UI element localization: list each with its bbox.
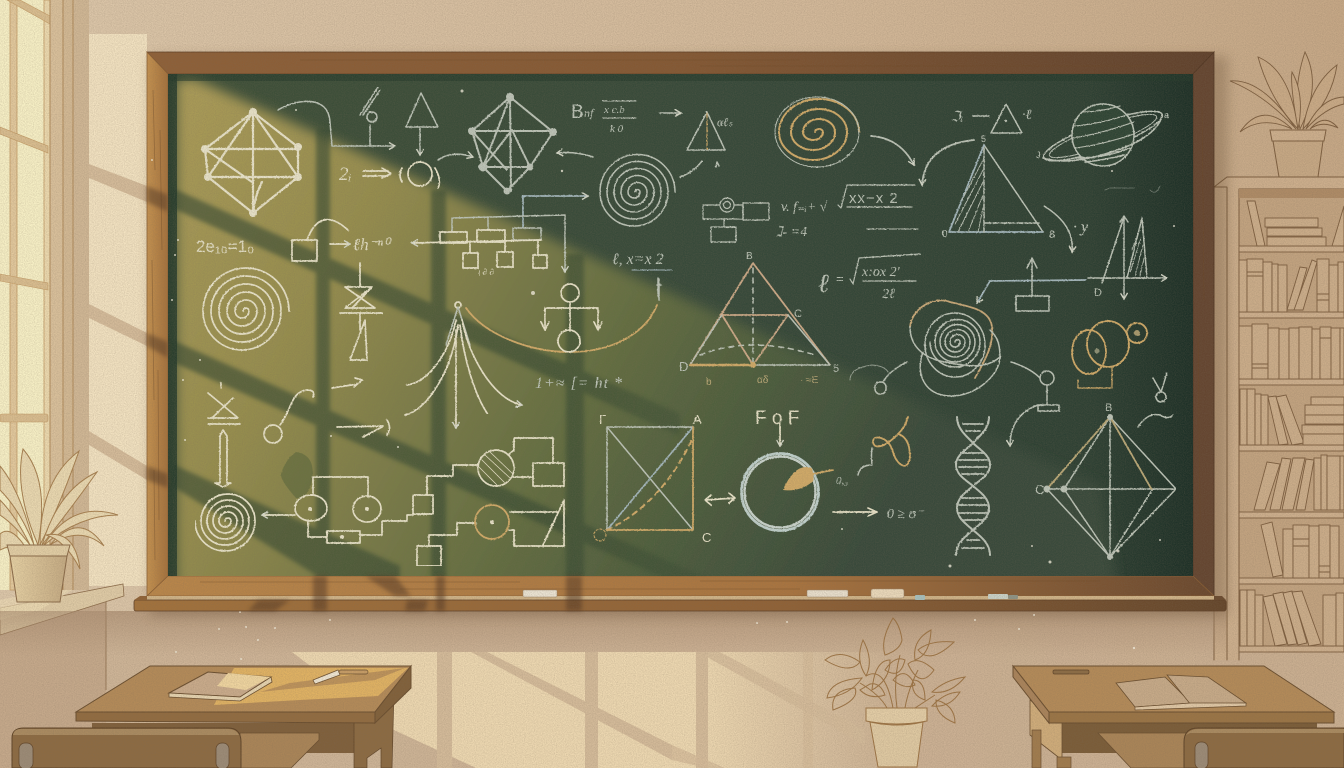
fraction formula: 2ℓ [882, 287, 895, 302]
polyhedron middle [438, 93, 593, 194]
fan of curves [405, 302, 522, 428]
small triangle with label [951, 104, 1032, 133]
desk top [76, 666, 411, 723]
hourglass figure [332, 263, 382, 388]
left chair [12, 728, 319, 768]
fraction formula [818, 254, 920, 302]
chalk dust specks [151, 90, 1175, 660]
square-root formula with box: ℷ- =4 [776, 225, 807, 240]
arrow and formula: 0,₃ [836, 475, 848, 487]
large diamond: C [1035, 482, 1044, 497]
book on desk [169, 672, 272, 701]
faint notes with y label: · y [1073, 219, 1089, 236]
chalkboard frame [147, 52, 1214, 596]
big centre triangle: C [794, 308, 802, 320]
spiral bottom left [195, 494, 255, 551]
fraction formula: ℓ [818, 269, 829, 298]
large ring with leaf [705, 408, 833, 530]
mini axis graph [1088, 216, 1167, 299]
desk body and legs [1030, 700, 1317, 768]
centre potted plant [825, 618, 965, 767]
large diamond: B [1105, 402, 1112, 414]
square-root formula with box: v. f₌ᵢ+ √ [781, 200, 828, 215]
left cross triangle and double arrow [208, 383, 240, 487]
books: shelf 5 [1254, 455, 1344, 510]
formula top B: x c.b [603, 104, 625, 116]
gold rings [1072, 321, 1147, 388]
formula top B: nf [584, 106, 595, 120]
big hatched triangle: 8 [1049, 229, 1055, 241]
spiral left [203, 268, 289, 350]
org chart diagram: ı ∂ ∂ [478, 267, 494, 277]
gold spiral [775, 97, 859, 167]
small formula right [612, 251, 672, 300]
small pendant and squiggle [1138, 373, 1173, 427]
smudge [281, 452, 313, 498]
formula top B [571, 101, 681, 135]
node left of rose [850, 362, 907, 394]
circle with implication [339, 162, 439, 188]
small formula right: ℓ, x=x 2 [612, 251, 664, 268]
books: shelf 3 [1239, 324, 1344, 379]
books: shelf 4 [1240, 389, 1344, 445]
big centre triangle: · ≈E [800, 375, 819, 386]
chalkboard surface [168, 74, 1193, 620]
chalk on desk [313, 670, 368, 684]
formula left: 2e₁₀=1₀ [196, 237, 254, 256]
shelf and books [1214, 177, 1344, 660]
sunlit area on board [176, 78, 1120, 600]
arrow and formula [833, 475, 925, 522]
small tall triangle: αℓₛ [717, 115, 733, 129]
faint notes with y label [1073, 186, 1160, 236]
formula top B: k 0 [610, 123, 624, 135]
window shadow bars on frame and tray [147, 186, 582, 611]
square with diagonals: C [702, 530, 711, 545]
square-root formula with box: xx−x 2 [849, 190, 899, 207]
square-root formula with box [703, 185, 918, 242]
frame drop shadow [150, 56, 1228, 616]
left desk [76, 666, 411, 768]
ringed planet [1036, 102, 1169, 170]
gold loop [858, 417, 910, 475]
square with diagonals: Γ [599, 412, 606, 427]
left potted plant [0, 449, 118, 602]
circle with implication: 2ᵢ [339, 164, 352, 185]
DNA double helix [956, 417, 990, 555]
big centre triangle: 5 [833, 363, 839, 375]
spiral top centre [600, 154, 675, 226]
large diamond [1035, 402, 1176, 560]
books: shelf 7 [1240, 590, 1344, 646]
window [0, 0, 73, 590]
parabola with node tree [466, 278, 658, 352]
window shadow bars on board [176, 128, 679, 576]
big centre triangle: b [706, 377, 712, 388]
square with diagonals: A [693, 412, 702, 427]
big centre triangle [679, 251, 839, 388]
rose of loops [910, 300, 1000, 396]
org chart diagram [412, 196, 588, 277]
sunlight on lower wall [0, 611, 1226, 768]
curved arrows [871, 136, 1072, 252]
chalk tray [134, 589, 1226, 611]
big centre triangle: B [746, 251, 753, 262]
node with arrow [1010, 362, 1059, 446]
square with diagonals [594, 412, 711, 545]
fraction formula: x:ox 2' [861, 265, 901, 280]
desk body [92, 690, 394, 768]
books: shelf 2 [1239, 259, 1344, 312]
chalk drawings [195, 87, 1176, 566]
right chair [1098, 728, 1344, 768]
desk top [1013, 666, 1334, 723]
big hatched triangle [942, 134, 1055, 241]
big centre triangle: αδ [757, 375, 769, 386]
right potted plant on shelf [1230, 52, 1344, 177]
formula middle: 1+≈ [= ht * [535, 375, 623, 392]
small triangle with label: ℑᵢ [951, 110, 963, 125]
polyhedron left [201, 108, 302, 217]
connector with triangle [278, 87, 438, 155]
formula top B: B [571, 102, 584, 123]
box with curved arrow: ℓh⁻ⁿ⁰ [353, 235, 392, 254]
sunlight patch on left wall [89, 34, 147, 586]
open book [1116, 675, 1246, 710]
box arrow pointer [977, 258, 1086, 311]
large ring with leaf: F o F [755, 408, 799, 429]
small triangle with label: ·ℓ [1022, 108, 1032, 123]
big hatched triangle: 5 [981, 134, 986, 144]
window sill and lower wall [0, 584, 124, 768]
ringed planet: a [1164, 110, 1169, 120]
hatched circle with boxes [478, 438, 564, 486]
big hatched triangle: 0 [942, 229, 948, 240]
books: shelf 6 [1261, 522, 1339, 578]
chalk pieces [523, 589, 1018, 600]
box with curved arrow [292, 220, 392, 261]
mini axis graph: D [1094, 287, 1102, 299]
circuit diagram left [262, 465, 478, 543]
books: shelf 1 [1247, 201, 1344, 246]
big centre triangle: D [679, 359, 688, 374]
fraction formula: = [836, 271, 844, 286]
circuit diagram lower [417, 500, 564, 566]
ringed planet: J [1036, 150, 1040, 160]
small circle with s-curve [264, 390, 390, 443]
right desk [1013, 666, 1334, 768]
arrow and formula: 0 ≥ ʊ⁻ [887, 507, 925, 522]
small tall triangle [680, 112, 733, 177]
